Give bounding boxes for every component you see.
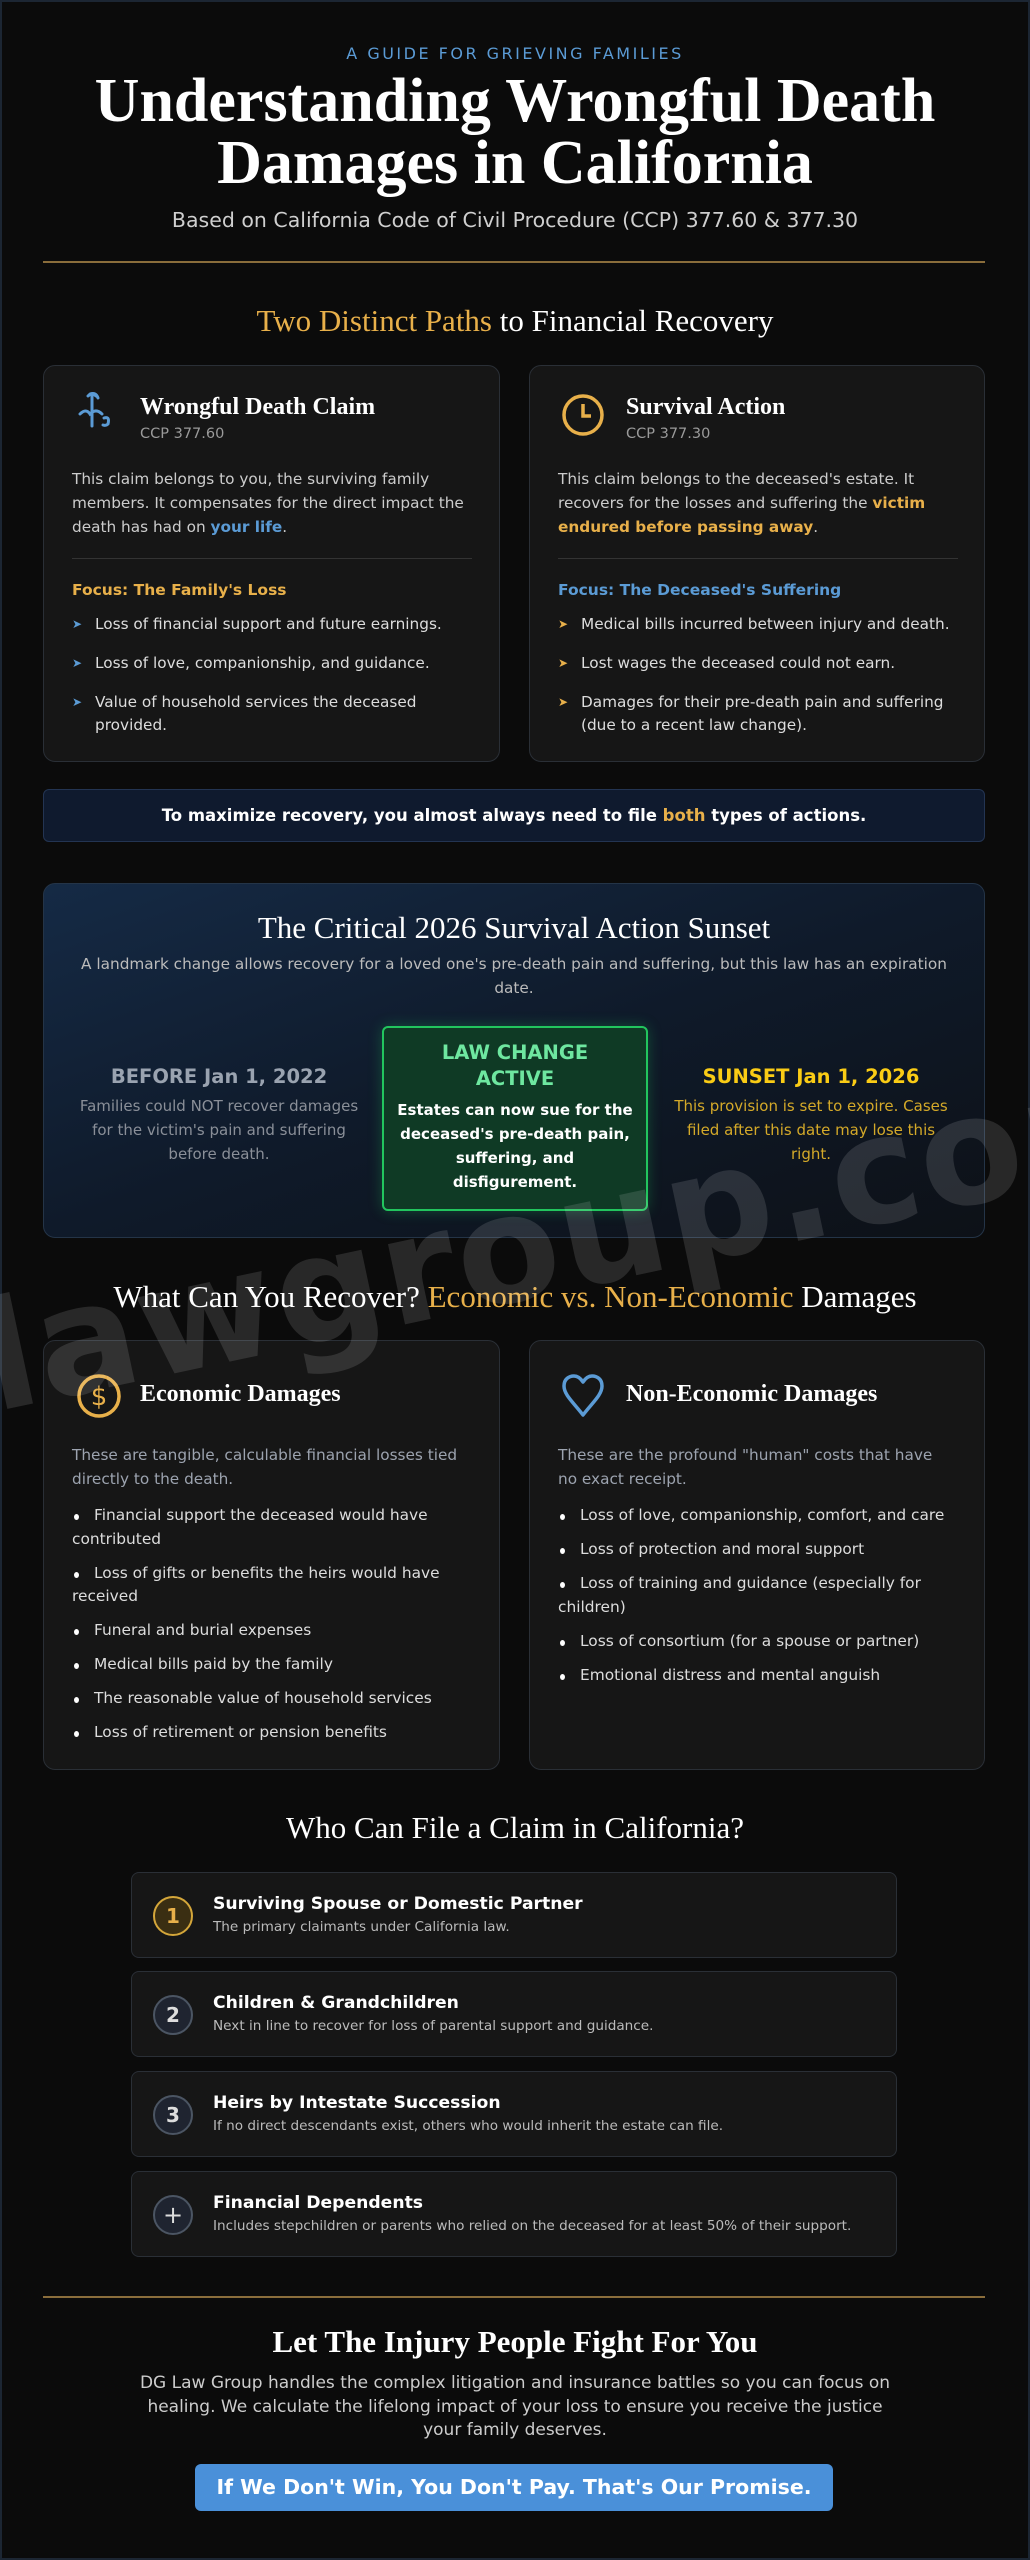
focus heading: Focus: The Deceased's Suffering [558, 581, 841, 599]
closing heading: Let The Injury People Fight For You [272, 2324, 758, 2359]
list item 3 [131, 2071, 897, 2157]
list item 3: If no direct descendants exist, others who would inherit the estate can file. [213, 2118, 723, 2134]
card title: Wrongful Death Claim [140, 394, 375, 420]
timeline: sunset: SUNSET Jan 1, 2026 [703, 1065, 919, 1088]
timeline: sunset: This provision is set to expire. Cases filed after this date may lose this right. [674, 1097, 948, 1163]
text block: This claim belongs to you, the surviving family members. It compensates for the direct impact the death has had on your life. [72, 470, 464, 536]
list item 2 [131, 1971, 897, 2057]
list: Lost wages the deceased could not earn. [581, 654, 895, 672]
title: Damages in California [217, 129, 813, 197]
list item 4: + [163, 2201, 183, 2229]
timeline: before: BEFORE Jan 1, 2022 [111, 1065, 327, 1088]
list item 3: Heirs by Intestate Succession [213, 2093, 501, 2113]
focus heading: Focus: The Family's Loss [72, 581, 287, 599]
eyebrow: A GUIDE FOR GRIEVING FAMILIES [346, 44, 684, 63]
list: ➤ [558, 695, 568, 709]
panel: non-economic damages [529, 1340, 985, 1770]
heading: what can you recover: What Can You Recover? Economic vs. Non-Economic Damages [113, 1279, 917, 1314]
list: Loss of retirement or pension benefits [94, 1723, 387, 1741]
panel: survival action [529, 365, 985, 762]
list [558, 1506, 944, 1684]
list item 4: Includes stepchildren or parents who relied on the deceased for at least 50% of their support. [213, 2218, 851, 2234]
icon: clock [562, 394, 604, 436]
timeline: law change: ACTIVE [476, 1067, 554, 1090]
list: ➤ [558, 617, 568, 631]
list: Emotional distress and mental anguish [580, 1666, 880, 1684]
panel: wrongful death claim: CCP 377.60 [140, 426, 224, 442]
heading: The Critical 2026 Survival Action Sunset [258, 910, 770, 945]
list: ➤ [558, 656, 568, 670]
card title: Economic Damages [140, 1381, 341, 1407]
list: Medical bills incurred between injury and death. [581, 615, 950, 633]
list: Damages for their pre-death pain and suffering (due to a recent law change). [581, 693, 944, 734]
list item 4 [131, 2171, 897, 2257]
callout banner [43, 789, 985, 842]
CTA button [195, 2464, 833, 2511]
list [72, 1506, 440, 1741]
list item 2: Children & Grandchildren [213, 1993, 459, 2013]
list: Funeral and burial expenses [94, 1621, 311, 1639]
list item 1: Surviving Spouse or Domestic Partner [213, 1894, 583, 1914]
list: Loss of love, companionship, and guidance. [95, 654, 430, 672]
intro: A landmark change allows recovery for a loved one's pre-death pain and suffering, but this law has an expiration date. [81, 955, 947, 997]
card title: Non-Economic Damages [626, 1381, 877, 1407]
list: The reasonable value of household services [94, 1689, 432, 1707]
list: Loss of love, companionship, comfort, and care [580, 1506, 944, 1524]
list: Medical bills paid by the family [94, 1655, 333, 1673]
icon: wrongful death [78, 392, 110, 428]
timeline: before [80, 1065, 358, 1163]
panel: economic damages [43, 1340, 500, 1770]
card title: Survival Action [626, 394, 785, 420]
timeline: law change: LAW CHANGE [442, 1041, 588, 1064]
timeline: sunset [674, 1065, 948, 1163]
timeline: before: Families could NOT recover damages for the victim's pain and suffering before death. [80, 1097, 358, 1163]
list: Loss of protection and moral support [580, 1540, 864, 1558]
list item 1: The primary claimants under California law. [213, 1919, 510, 1935]
icon: heart [562, 1374, 604, 1417]
icon: dollar: $ [91, 1382, 107, 1412]
intro: These are the profound "human" costs that have no exact receipt. [558, 1446, 932, 1488]
list item 1: 1 [166, 1904, 180, 1928]
timeline: law change [382, 1026, 648, 1211]
list: ➤ [72, 617, 82, 631]
list: Loss of gifts or benefits the heirs would have received [72, 1564, 440, 1605]
list: Loss of consortium (for a spouse or partner) [580, 1632, 919, 1650]
heading: who can file: Who Can File a Claim in California? [286, 1810, 744, 1845]
list [72, 615, 442, 734]
text block: This claim belongs to the deceased's estate. It recovers for the losses and suffering the victim endured before passing away. [558, 470, 925, 536]
list [558, 615, 950, 734]
list: ➤ [72, 656, 82, 670]
callout banner: To maximize recovery, you almost always need to file both types of actions. [162, 806, 866, 825]
icon: dollar [77, 1374, 121, 1418]
list: Loss of financial support and future earnings. [95, 615, 442, 633]
list: Value of household services the deceased provided. [95, 693, 416, 734]
title [95, 67, 935, 197]
list item 3: 3 [166, 2103, 180, 2127]
intro: These are tangible, calculable financial losses tied directly to the death. [72, 1446, 457, 1488]
title: Understanding Wrongful Death [95, 67, 935, 135]
CTA button: If We Don't Win, You Don't Pay. That's Our Promise. [216, 2475, 812, 2499]
panel: sunset [43, 883, 985, 1238]
list: ➤ [72, 695, 82, 709]
list item 2: Next in line to recover for loss of parental support and guidance. [213, 2018, 653, 2034]
timeline: law change: Estates can now sue for the deceased's pre-death pain, suffering, and disfigurement. [397, 1101, 633, 1191]
list item 4: Financial Dependents [213, 2193, 423, 2213]
closing text: DG Law Group handles the complex litigation and insurance battles so you can focus on healing. We calculate the lifelong impact of your loss to ensure you receive the justice your family deserves. [140, 2373, 890, 2440]
list: Loss of training and guidance (especially for children) [558, 1574, 921, 1616]
panel: survival action: CCP 377.30 [626, 426, 710, 442]
list: Financial support the deceased would have contributed [72, 1506, 428, 1548]
heading: two paths: Two Distinct Paths to Financial Recovery [256, 303, 774, 338]
subtitle: Based on California Code of Civil Procedure (CCP) 377.60 & 377.30 [172, 208, 858, 232]
list item 2: 2 [166, 2003, 180, 2027]
list item 1 [131, 1872, 897, 1958]
panel: wrongful death claim [43, 365, 500, 762]
